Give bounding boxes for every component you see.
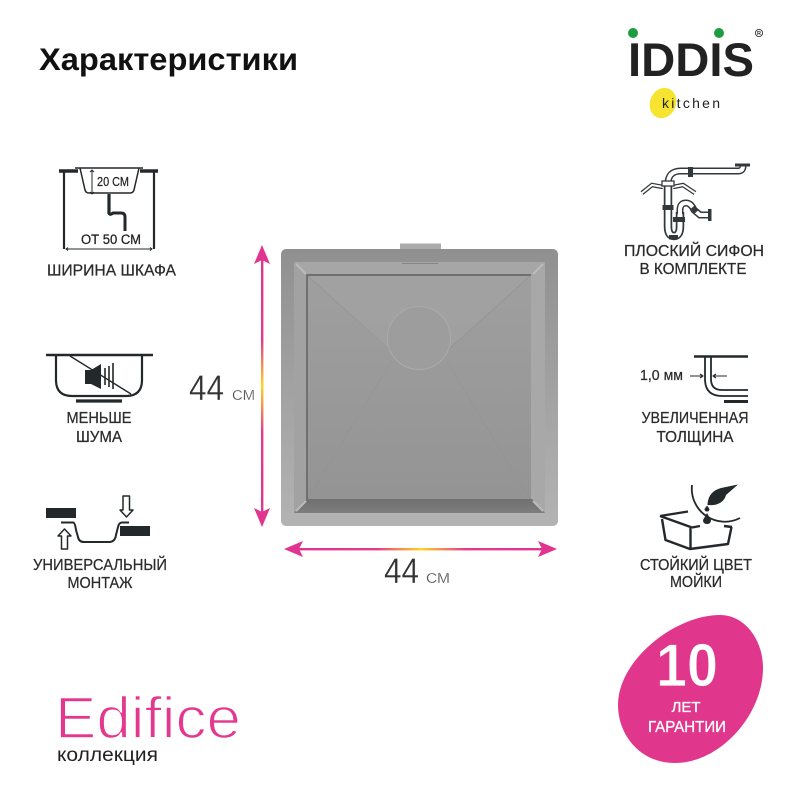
label: universal mounting: МОНТАЖ [68,575,133,592]
icon: cabinet width: ОТ 50 СМ [81,232,141,247]
width label [384,552,450,591]
label: cabinet width: ШИРИНА ШКАФА [47,262,177,280]
logo: IDDIS kitchen: kitchen [662,95,720,111]
arrow: width dimension [284,541,557,557]
height label: 44 [189,369,224,408]
height label: СМ [232,387,255,404]
label: less noise [66,410,132,446]
label: less noise: ШУМА [76,429,123,446]
label: durable colour: СТОЙКИЙ ЦВЕТ [640,556,752,574]
label: siphon [624,242,764,278]
icon: thickness [640,356,748,402]
label: universal mounting [33,556,167,592]
badge: 10 year warranty: 10 [656,632,718,699]
label: thickness [642,410,748,446]
title: Характеристики [39,41,298,77]
logo: IDDIS kitchen [628,28,763,122]
logo: IDDIS kitchen: IDDIS [628,33,754,86]
icon: siphon [642,164,750,240]
badge: 10 year warranty: ЛЕТ [672,699,700,716]
logo: IDDIS kitchen: R [757,31,761,37]
collection caption: коллекция [57,745,158,766]
arrow: height dimension [254,245,270,527]
label: durable colour [640,556,752,591]
label: less noise: МЕНЬШЕ [66,410,132,427]
label: durable colour: МОЙКИ [670,573,722,591]
label: siphon: В КОМПЛЕКТЕ [640,261,746,278]
label: siphon: ПЛОСКИЙ СИФОН [624,242,764,260]
icon: universal mounting [46,496,150,549]
icon: thickness: 1,0 мм [640,368,683,384]
icon: durable colour [660,484,740,549]
collection name: Edifice [55,686,241,751]
icon: cabinet width [59,168,158,250]
label: thickness: ТОЛЩИНА [656,429,734,446]
product: steel sink [281,244,558,526]
height label [189,369,255,408]
width label: 44 [384,552,419,591]
badge: 10 year warranty [618,615,763,763]
label: thickness: УВЕЛИЧЕННАЯ [642,410,748,427]
icon: cabinet width: 20 СМ [97,175,129,189]
badge: 10 year warranty: ГАРАНТИИ [648,719,726,736]
width label: СМ [426,570,450,587]
icon: less noise [46,355,153,401]
label: universal mounting: УНИВЕРСАЛЬНЫЙ [33,556,167,574]
